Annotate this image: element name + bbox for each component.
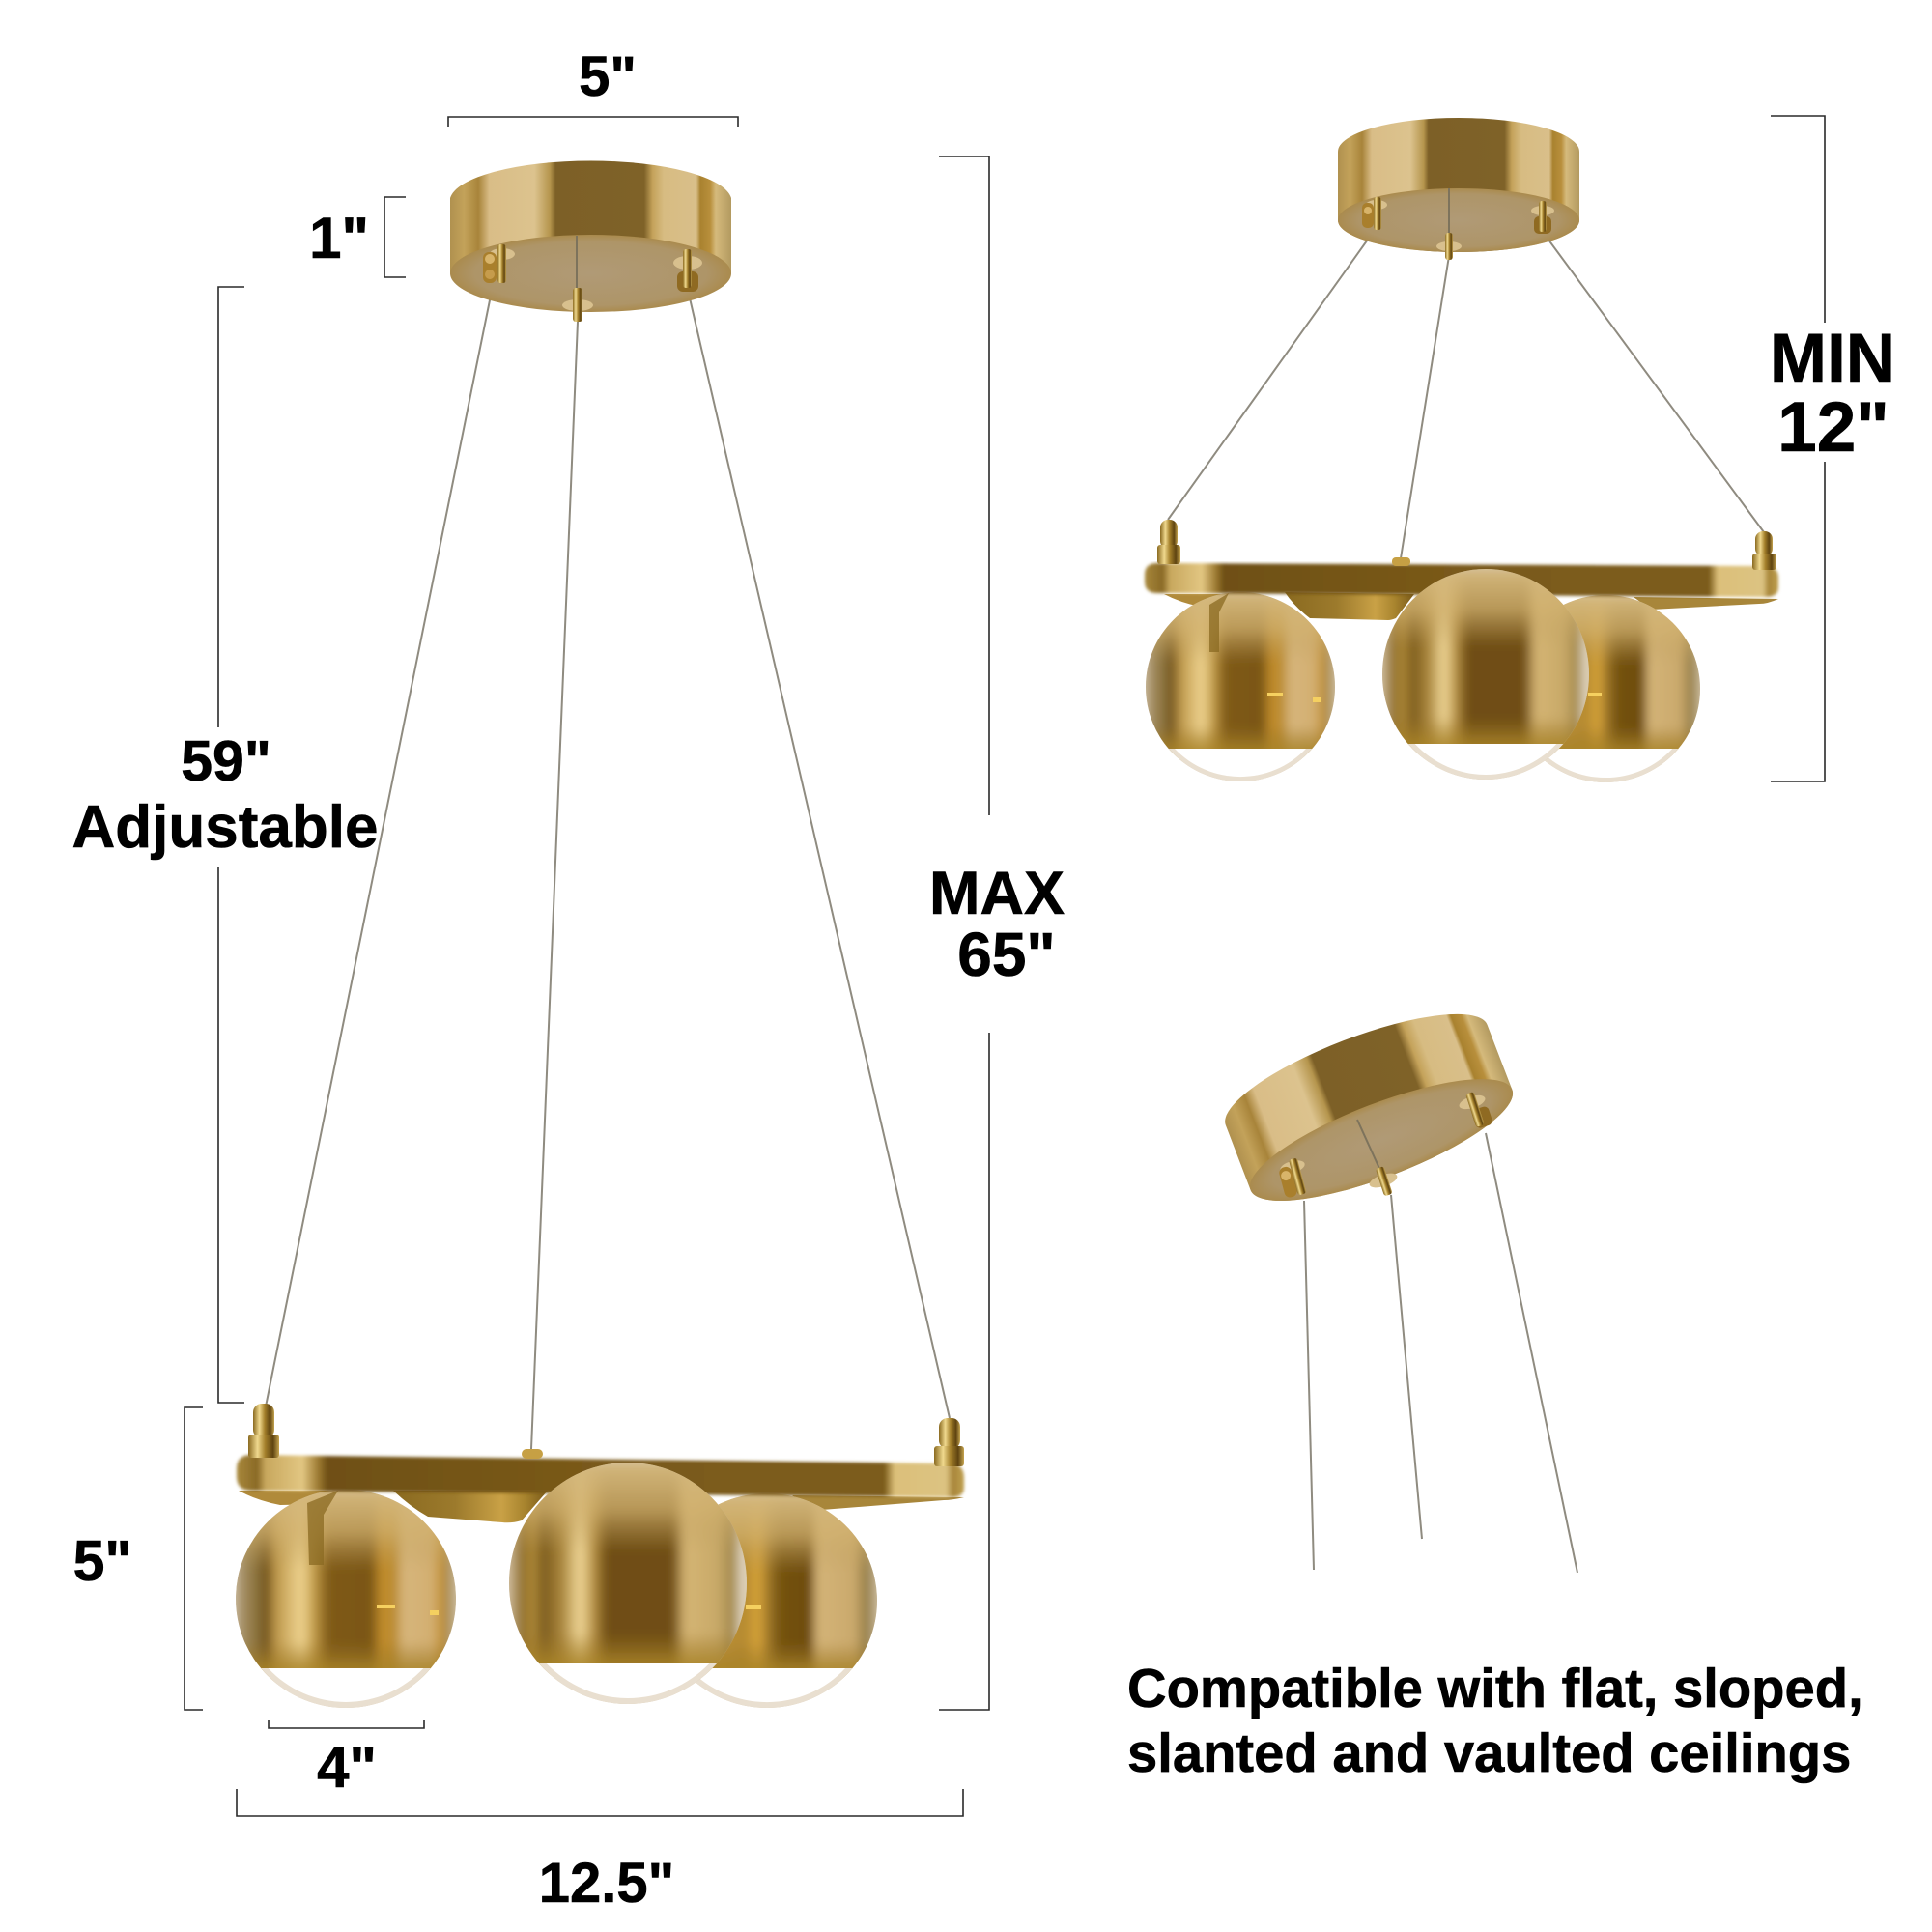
dimension: shade height 5 inches: 5" — [73, 1529, 131, 1593]
dimension: canopy height 1 inch — [309, 197, 406, 277]
suspension wires — [1168, 232, 1764, 558]
dimension: shade width 4 inches — [269, 1720, 424, 1800]
back of ring frame — [239, 1491, 964, 1522]
ring bar — [237, 1455, 964, 1497]
right globe shade — [1545, 595, 1700, 782]
caption: ceiling compatibility: Compatible with flat, sloped, — [1127, 1658, 1863, 1719]
dimension: min height 12 inches: MIN — [1770, 321, 1895, 397]
compact lamp, minimum height — [1145, 118, 1778, 787]
left pin — [248, 1404, 279, 1458]
mount: center — [1365, 1163, 1402, 1200]
dimension: shade width 4 inches: 4" — [317, 1735, 377, 1800]
ceiling canopy — [450, 160, 731, 322]
dimension: shade height 5 inches — [73, 1407, 203, 1710]
dimension: min height 12 inches: 12" — [1777, 388, 1889, 467]
main pendant lamp, fully extended — [236, 160, 964, 1712]
mount: left — [483, 244, 515, 283]
dimension: canopy width 5 inches: 5" — [579, 45, 637, 108]
mount: center — [1436, 233, 1462, 260]
center pin — [1392, 557, 1410, 566]
mount: center — [562, 288, 593, 322]
dimension: max height 65 inches: MAX — [929, 860, 1065, 927]
left globe shade — [236, 1490, 456, 1712]
sloped ceiling canopy with wires — [1212, 990, 1577, 1573]
mount: left — [1276, 1156, 1312, 1199]
mount: right — [673, 249, 702, 292]
dimension: overall width 12.5 inches: 12.5" — [539, 1852, 674, 1915]
center globe shade — [509, 1463, 747, 1707]
dimension: adjustable cable 59 inches — [72, 287, 378, 1403]
right globe shade — [696, 1493, 877, 1708]
center pin — [522, 1449, 543, 1459]
back of ring frame — [1164, 592, 1778, 620]
mount: left — [1362, 197, 1387, 230]
center globe shade — [1382, 569, 1589, 782]
mount: right — [1531, 201, 1554, 234]
caption: ceiling compatibility — [1127, 1658, 1863, 1783]
center cable stub — [1357, 1120, 1381, 1173]
suspension wires — [1304, 1133, 1577, 1573]
ceiling canopy — [1338, 118, 1579, 260]
dimension: canopy width 5 inches — [448, 45, 738, 127]
tilted canopy — [1212, 990, 1525, 1224]
ring bar — [1145, 563, 1778, 597]
left pin — [1157, 520, 1180, 564]
dimension: max height 65 inches — [929, 156, 1065, 1710]
suspension wires — [266, 286, 950, 1449]
dimension: overall width 12.5 inches — [237, 1789, 963, 1915]
dimension: adjustable cable 59 inches: Adjustable — [72, 794, 378, 861]
left globe shade — [1146, 592, 1335, 787]
mount: right — [1457, 1089, 1493, 1132]
dimension: adjustable cable 59 inches: 59" — [181, 729, 271, 793]
right pin — [934, 1418, 964, 1466]
dimension: max height 65 inches: 65" — [957, 920, 1056, 989]
dimension: canopy height 1 inch: 1" — [309, 206, 369, 270]
caption: ceiling compatibility: slanted and vaulted ceilings — [1127, 1722, 1851, 1783]
right pin — [1752, 531, 1776, 570]
dimension: min height 12 inches — [1770, 116, 1895, 781]
